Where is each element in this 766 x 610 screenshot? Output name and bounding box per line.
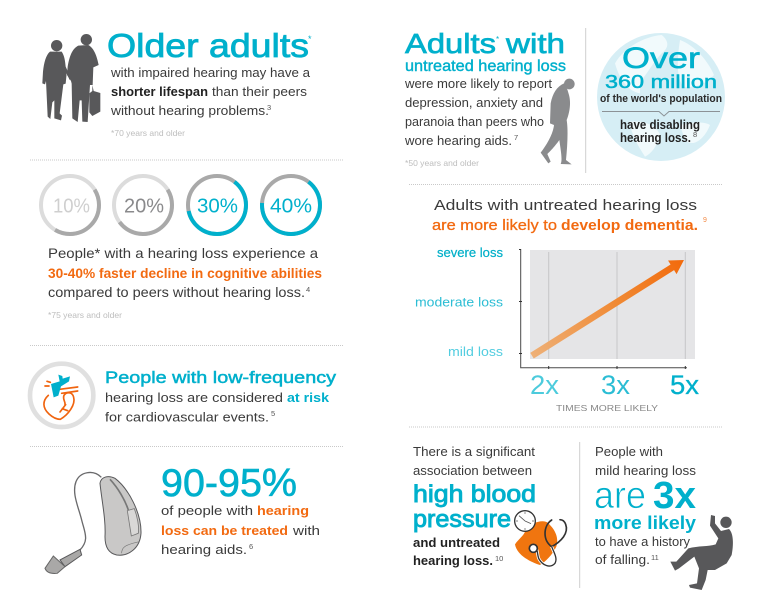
panel: hearing aids — [45, 462, 320, 573]
text block: people with mild hearing loss — [595, 444, 696, 478]
heading: Adults with: * — [496, 35, 499, 44]
text: of the world's population: of the world's population — [600, 93, 722, 105]
panel: cognitive decline — [41, 176, 322, 320]
text block: depression — [404, 76, 552, 148]
callout pointer line — [602, 112, 720, 116]
text block: at risk: hearing loss are considered — [105, 390, 283, 405]
icon: elderly couple silhouette — [42, 34, 100, 122]
icon: walking man silhouette — [541, 79, 575, 164]
text block: can be treated: 6 — [249, 542, 253, 551]
heading: high blood pressure: pressure — [413, 506, 511, 533]
ring 40% — [262, 176, 320, 234]
text block: association: association between — [413, 463, 532, 478]
text block: depression: 7 — [514, 133, 518, 142]
text block: history of falling — [595, 534, 690, 567]
heading: Adults with: with — [505, 28, 565, 59]
heading — [432, 197, 707, 234]
text: have disabling hearing loss — [620, 117, 700, 145]
ring 10%: 10% — [53, 196, 90, 218]
stat: 360 million: 360 million — [605, 71, 717, 92]
ring 30% — [188, 176, 246, 234]
text block: can be treated: hearing — [257, 503, 309, 518]
text block: at risk: at risk — [287, 390, 330, 405]
heading: 9 — [703, 217, 707, 224]
text block: can be treated: loss can be treated — [161, 523, 288, 538]
text block: history of falling: to have a history — [595, 534, 690, 549]
heading: Adults with untreated hearing loss — [434, 197, 697, 214]
y-axis labels: mild loss — [448, 345, 503, 359]
text block: shorter lifespan: shorter lifespan — [111, 84, 208, 99]
text block: history of falling: 11 — [651, 553, 659, 562]
ring 10% — [41, 176, 99, 234]
heading: develop dementia. — [561, 217, 698, 234]
x-axis labels: 3x — [601, 370, 630, 400]
stat: more likely: more likely — [594, 513, 696, 533]
stat: Over: Over — [622, 42, 700, 75]
arrow — [530, 260, 684, 358]
panel: risk of falling — [594, 444, 733, 590]
text block: can be treated: hearing aids. — [161, 542, 247, 557]
text block: faster decline: People* with a hearing loss experience a — [48, 245, 318, 261]
text block: and untreated hearing loss: and untreated — [413, 535, 500, 550]
icon: falling man silhouette — [670, 515, 733, 590]
panel: 360 million globe — [597, 33, 725, 161]
stat: 90-95%: 90-95% — [161, 462, 297, 505]
x-axis labels: 2x — [530, 370, 559, 400]
panel: high blood pressure — [413, 444, 566, 568]
icon: heart in ring — [30, 364, 93, 427]
stat: are 3x: 3x — [653, 475, 696, 517]
x-axis labels — [530, 370, 699, 400]
text: have disabling hearing loss: 8 — [693, 130, 697, 139]
text block: depression: were more likely to report — [404, 76, 552, 91]
text block: and untreated hearing loss: hearing loss. — [413, 553, 493, 568]
text block: depression: paranoia than peers who — [405, 114, 544, 129]
text block: depression: depression, anxiety and — [405, 95, 543, 110]
text block: at risk: for cardiovascular events. — [105, 410, 269, 424]
text block: depression: wore hearing aids. — [404, 133, 512, 148]
text: have disabling hearing loss: hearing loss. — [620, 130, 691, 145]
text block: and untreated hearing loss: 10 — [495, 554, 503, 563]
text block: can be treated: of people with — [161, 503, 253, 518]
y-axis labels: severe loss — [437, 246, 503, 260]
footnote: *70 years and older — [111, 128, 185, 138]
text block: faster decline: 30-40% faster decline in cognitive abilities — [48, 265, 322, 281]
text block: people with mild hearing loss: mild hearing loss — [595, 463, 696, 478]
panel: older adults — [42, 27, 312, 138]
footnote: *50 years and older — [405, 158, 479, 168]
heading: Older adults: Older adults — [107, 27, 309, 64]
text block: can be treated: with — [292, 523, 320, 538]
stat: are 3x: are — [594, 475, 646, 517]
text block: shorter lifespan: than their peers — [212, 84, 307, 99]
text block: people with mild hearing loss: People with — [595, 444, 663, 459]
text block: faster decline: 4 — [306, 285, 310, 294]
heading: are more likely to — [432, 217, 557, 234]
y-axis labels: moderate loss — [415, 296, 503, 310]
panel: adults with untreated hearing loss — [404, 28, 575, 168]
heading: high blood pressure: high blood — [413, 481, 536, 508]
heading: high blood pressure — [413, 481, 536, 533]
x-axis title: TIMES MORE LIKELY — [556, 403, 658, 413]
ring 30%: 30% — [197, 196, 238, 218]
text block: at risk — [105, 390, 330, 424]
text block: history of falling: of falling. — [595, 552, 650, 567]
text block: can be treated — [161, 503, 320, 557]
x-axis labels: 5x — [670, 370, 699, 400]
heading: Adults with — [405, 28, 565, 59]
panel: dementia chart — [415, 197, 707, 413]
stat: are 3x — [594, 475, 696, 517]
asterisk: * — [308, 34, 312, 44]
text block: shorter lifespan: without hearing problems. — [110, 103, 269, 118]
text block: shorter lifespan — [110, 65, 311, 118]
text block: at risk: 5 — [271, 409, 275, 418]
text block: faster decline — [48, 245, 322, 300]
ring 40%: 40% — [270, 196, 312, 218]
text block: faster decline: compared to peers without hearing loss. — [48, 284, 305, 300]
heading: Adults with: Adults — [405, 28, 496, 59]
text block: association: There is a significant — [413, 444, 535, 459]
icon: globe — [597, 33, 725, 161]
heading: low-frequency: People with low-frequency — [105, 368, 337, 387]
line chart — [415, 246, 699, 413]
text: have disabling hearing loss: have disabling — [620, 117, 700, 132]
icon: hearing aid — [45, 473, 141, 573]
footnote: *75 years and older — [48, 310, 122, 320]
subheading: untreated hearing loss — [405, 58, 566, 75]
ring 20% — [114, 176, 172, 234]
chart: percentage rings — [41, 176, 320, 234]
text block: shorter lifespan: 3 — [267, 103, 271, 112]
icon: heart gauge and stethoscope — [515, 511, 566, 566]
panel: cardiovascular risk — [30, 364, 337, 427]
text block: association — [413, 444, 535, 478]
y-axis labels — [415, 246, 503, 359]
text block: shorter lifespan: with impaired hearing may have a — [110, 65, 311, 80]
ring 20%: 20% — [124, 196, 164, 218]
text block: and untreated hearing loss — [413, 535, 503, 568]
